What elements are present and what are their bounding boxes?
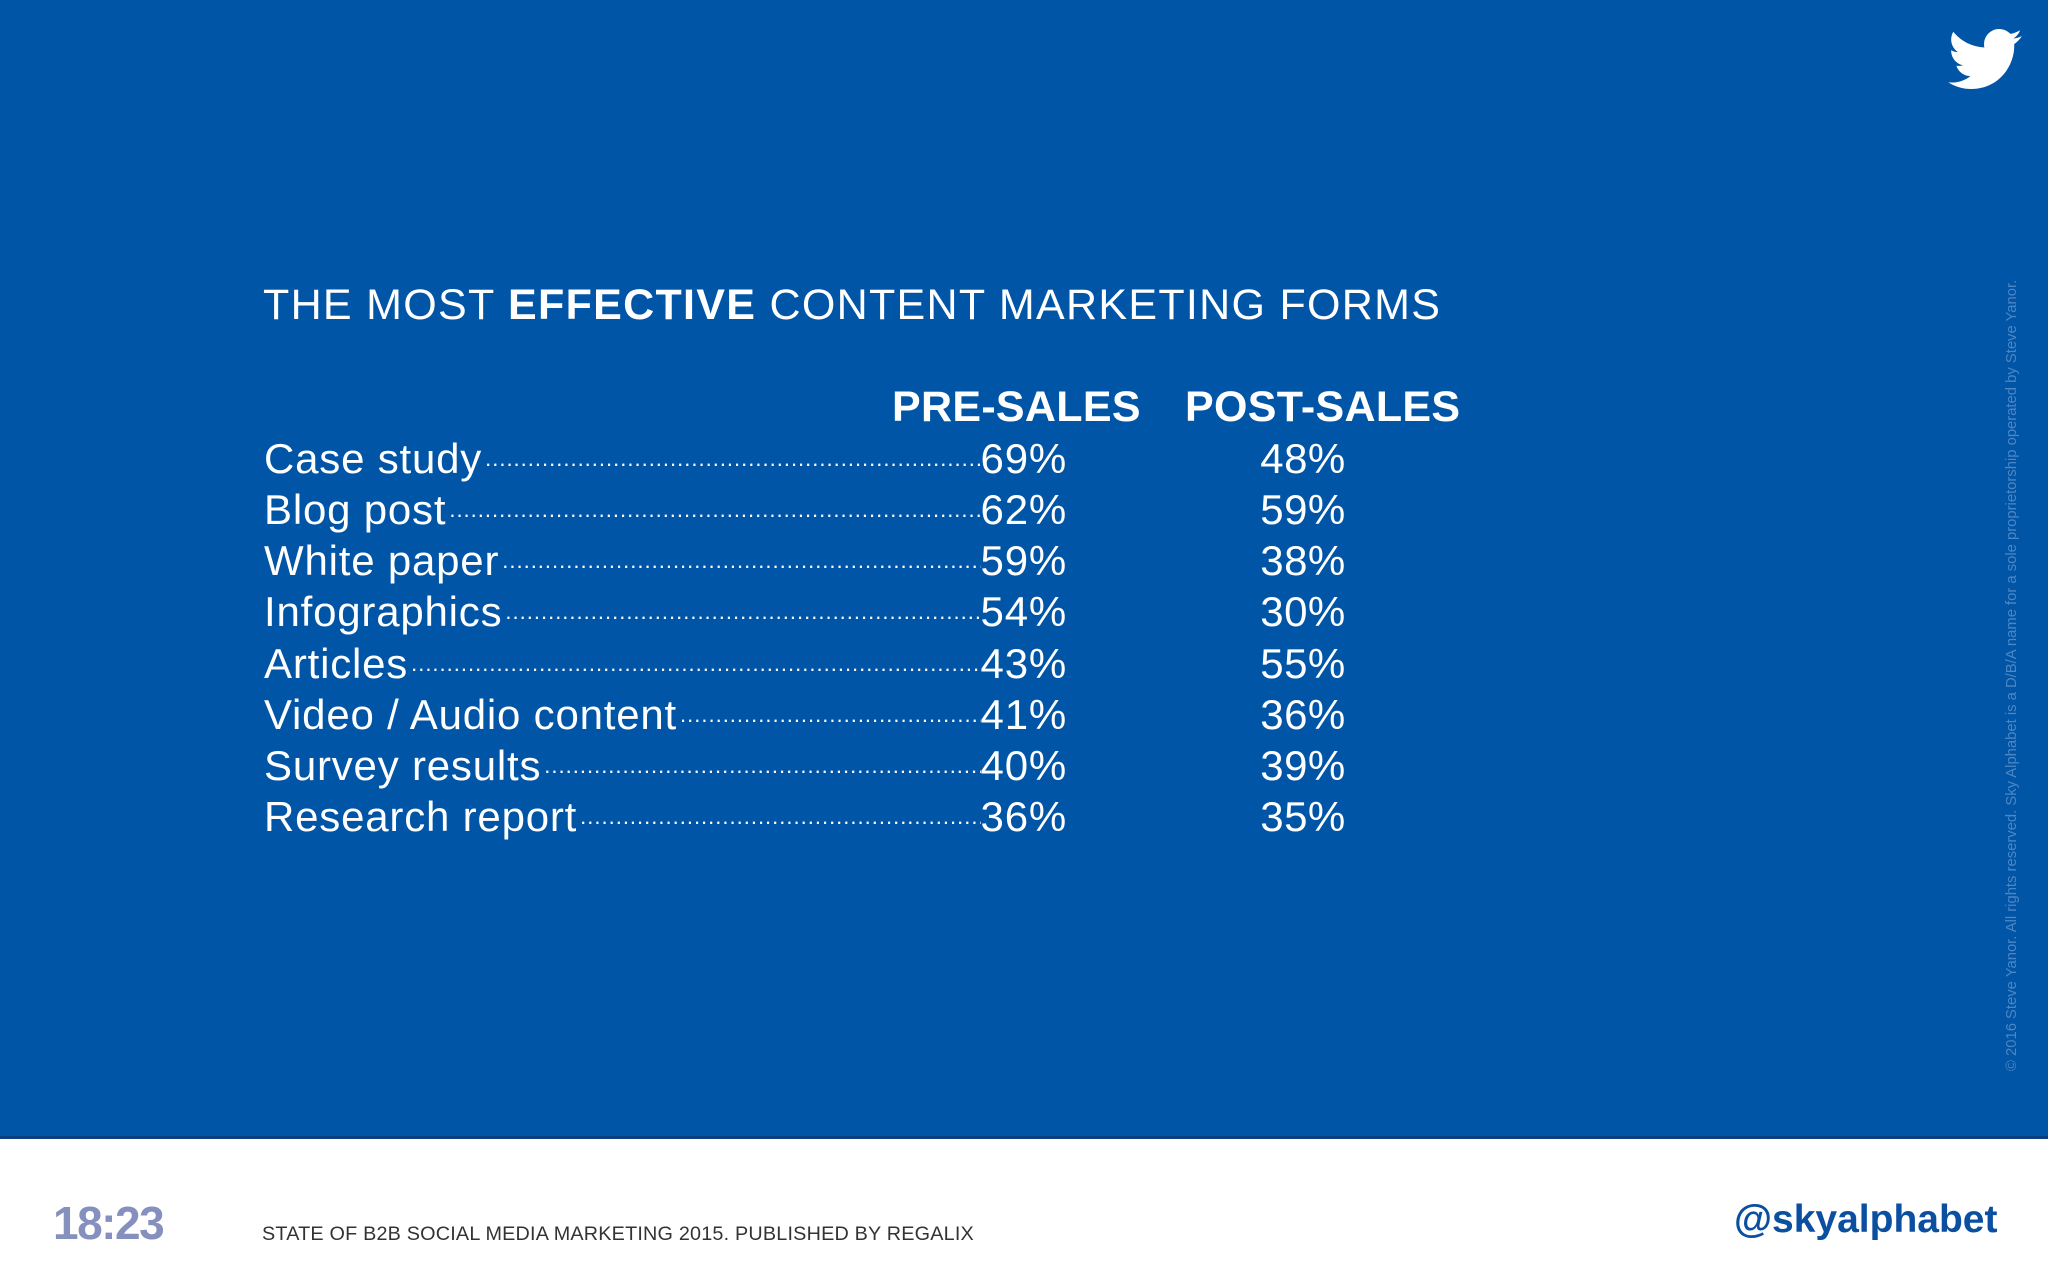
time: 18:23 xyxy=(53,1197,163,1249)
table rows: Case study xyxy=(264,435,482,482)
table rows: 62% xyxy=(981,486,1067,533)
table rows: 43% xyxy=(981,640,1067,687)
table rows: 30% xyxy=(1260,588,1346,635)
table rows: 35% xyxy=(1260,793,1346,840)
table rows: White paper xyxy=(264,537,499,584)
table rows: Blog post xyxy=(264,486,446,533)
table rows: 40% xyxy=(981,742,1067,789)
title: THE MOST EFFECTIVE CONTENT MARKETING FORMS xyxy=(263,281,1441,329)
table rows: 48% xyxy=(1260,435,1346,482)
table rows: 69% xyxy=(981,435,1067,482)
table rows: Research report xyxy=(264,793,577,840)
table rows: Infographics xyxy=(264,588,502,635)
table rows xyxy=(264,435,1346,840)
table rows: 36% xyxy=(1260,691,1346,738)
table rows: 55% xyxy=(1260,640,1346,687)
table rows: 39% xyxy=(1260,742,1346,789)
table rows: 54% xyxy=(981,588,1067,635)
table rows: 41% xyxy=(981,691,1067,738)
source: STATE OF B2B SOCIAL MEDIA MARKETING 2015. PUBLISHED BY REGALIX xyxy=(262,1223,974,1245)
table rows: Video / Audio content xyxy=(264,691,677,738)
table rows: 59% xyxy=(1260,486,1346,533)
handle: @skyalphabet xyxy=(1734,1198,1997,1241)
table rows: Articles xyxy=(264,640,408,687)
icon: twitter bird xyxy=(1948,29,2022,89)
table rows: Survey results xyxy=(264,742,541,789)
column headers xyxy=(892,383,1460,431)
table rows: 59% xyxy=(981,537,1067,584)
text: PRE-SALES xyxy=(892,383,1141,431)
text: POST-SALES xyxy=(1185,383,1460,431)
copyright vertical text: © 2016 Steve Yanor. All rights reserved. Sky Alphabet is a D/B/A name for a sole proprietorship operated by Steve Yanor. xyxy=(2004,280,2020,1071)
table rows: 38% xyxy=(1260,537,1346,584)
table rows: 36% xyxy=(981,793,1067,840)
